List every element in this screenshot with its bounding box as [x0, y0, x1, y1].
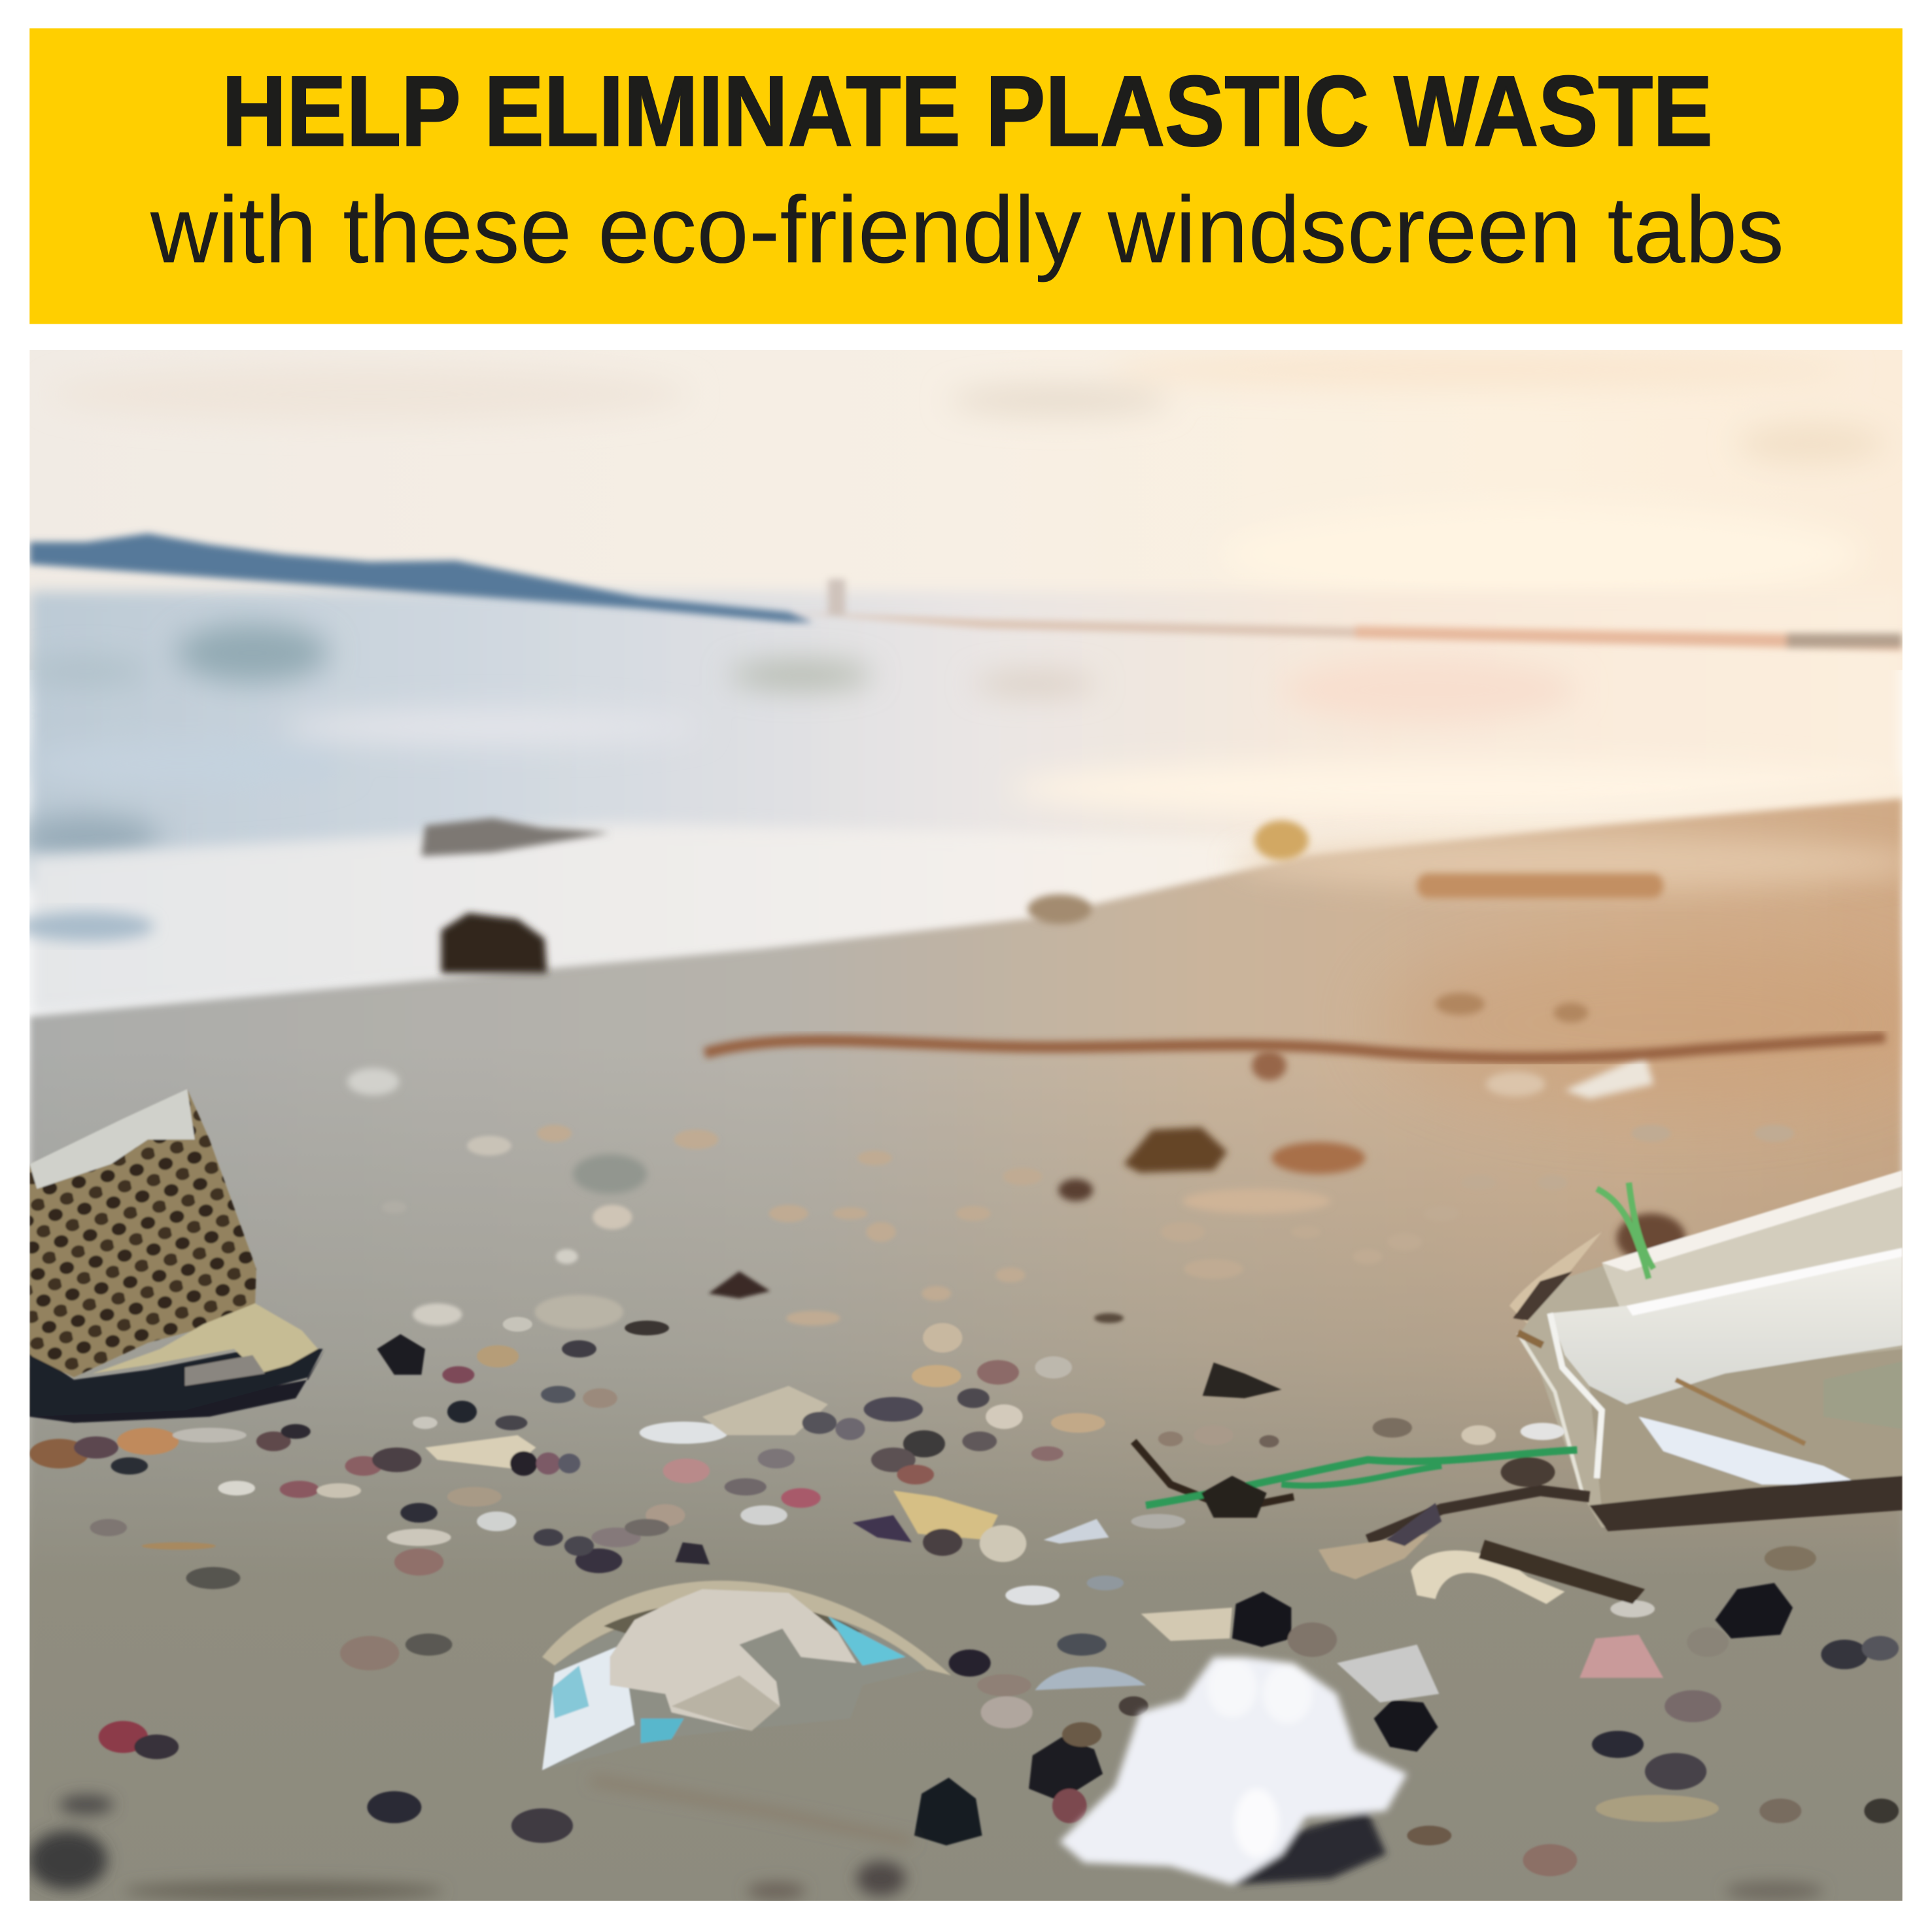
- shells and pebbles: [29, 1317, 1899, 1876]
- green rope and seaweed: [1133, 1441, 1589, 1540]
- banner: [29, 28, 1903, 324]
- photo: polluted beach at sunset: [12, 350, 1932, 1901]
- sky: [29, 350, 1903, 670]
- blurred distant rocks: [347, 818, 1663, 1214]
- styrofoam chunk: [1060, 1657, 1407, 1885]
- coral rock: [29, 1089, 325, 1423]
- wet sand: [29, 776, 1903, 1016]
- foreground blurred debris: [28, 1780, 1823, 1901]
- blurred mid pebbles: [382, 1125, 1794, 1329]
- driftwood line: [705, 1037, 1885, 1058]
- sand: [29, 798, 1932, 1901]
- sea: [12, 591, 1903, 887]
- title: HELP ELIMINATE PLASTIC WASTE: [222, 56, 1713, 167]
- subtitle: with these eco-friendly windscreen tabs: [150, 177, 1784, 282]
- plastic cup debris: [542, 1581, 951, 1770]
- distant hills: [29, 534, 1903, 651]
- glass bottle: [1509, 1171, 1903, 1531]
